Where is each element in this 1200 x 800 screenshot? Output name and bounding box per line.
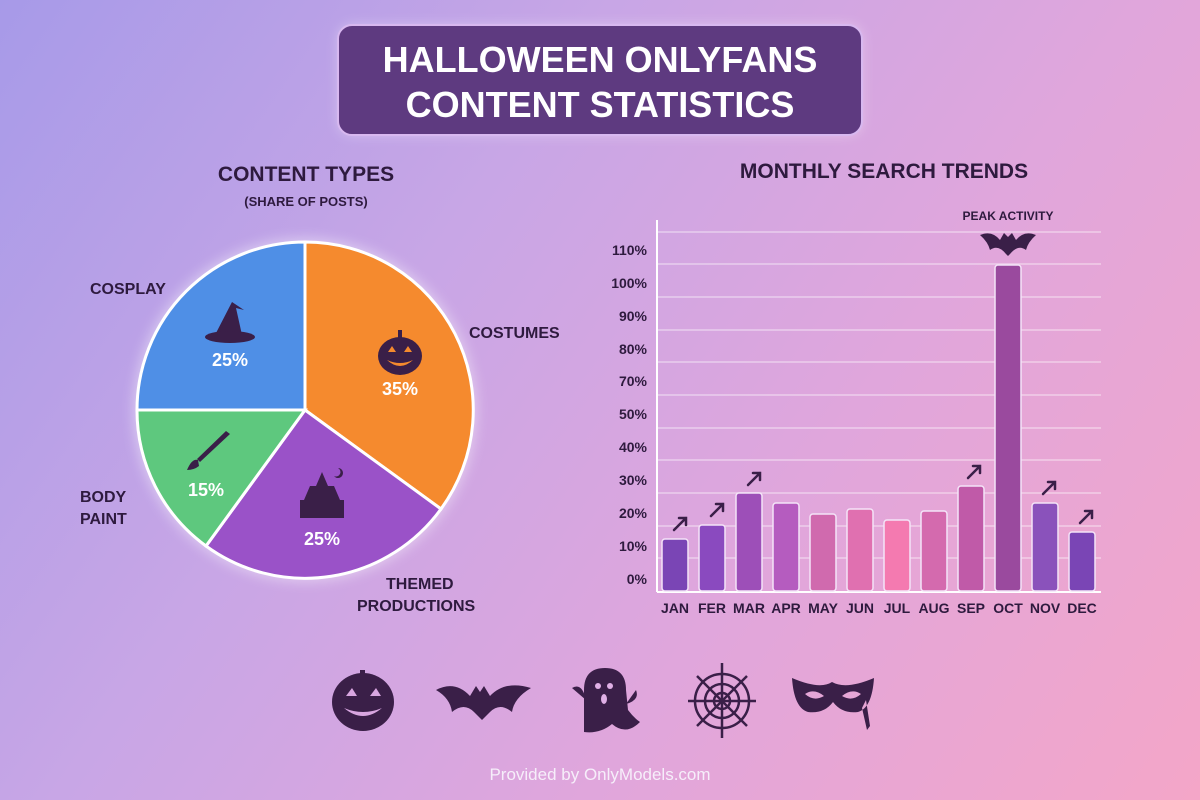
bar chart: FER	[698, 600, 726, 616]
bar chart: 100%	[611, 275, 648, 291]
heading: monthly search trends: MONTHLY SEARCH TRENDS	[740, 160, 1028, 183]
label: themed productions: PRODUCTIONS	[357, 598, 476, 615]
bar chart: 0%	[627, 571, 648, 587]
icon: bat peak	[980, 233, 1036, 256]
label: costumes: COSTUMES	[469, 325, 560, 342]
label: body paint: BODY	[80, 489, 127, 506]
title	[338, 25, 862, 135]
pie chart: 25%	[304, 529, 340, 549]
pie chart: 35%	[382, 379, 418, 399]
bar chart: MAR	[733, 600, 765, 616]
bar chart: 30%	[619, 472, 648, 488]
icon: ghost	[572, 668, 640, 732]
bar chart: 10%	[619, 538, 648, 554]
bar chart: APR	[771, 600, 801, 616]
label: cosplay: COSPLAY	[90, 281, 166, 298]
icon: spider web	[688, 663, 756, 738]
title: HALLOWEEN ONLYFANS	[383, 39, 817, 80]
icon: pumpkin	[378, 330, 422, 375]
heading: content types: CONTENT TYPES	[218, 163, 394, 186]
bar chart: MAY	[808, 600, 839, 616]
title: CONTENT STATISTICS	[406, 84, 794, 125]
icon: bat	[436, 685, 531, 720]
bar chart: SEP	[957, 600, 985, 616]
icon: witch hat	[205, 302, 255, 343]
pie chart: 25%	[212, 350, 248, 370]
bar chart	[611, 209, 1101, 616]
bar chart: NOV	[1030, 600, 1061, 616]
bar chart: 80%	[619, 341, 648, 357]
icon: haunted house	[300, 468, 344, 518]
bar chart: AUG	[918, 600, 950, 616]
bar chart: 20%	[619, 505, 648, 521]
bar chart: JUN	[846, 600, 874, 616]
bar chart: 50%	[619, 406, 648, 422]
heading: content types	[218, 163, 394, 209]
bar chart: 90%	[619, 308, 648, 324]
icons row	[332, 663, 874, 738]
bar chart: 70%	[619, 373, 648, 389]
peak label: PEAK ACTIVITY	[963, 209, 1053, 223]
pie chart: 15%	[188, 480, 224, 500]
bar chart: 40%	[619, 439, 648, 455]
pie chart	[133, 238, 477, 582]
bar chart: OCT	[993, 600, 1023, 616]
bar chart: JAN	[661, 600, 689, 616]
footer: Provided by OnlyModels.com	[489, 765, 711, 784]
bar chart: JUL	[884, 600, 911, 616]
bar chart: DEC	[1067, 600, 1097, 616]
trend arrows	[674, 466, 1092, 530]
heading: content types: (SHARE OF POSTS)	[244, 194, 368, 209]
icon: mask	[792, 678, 874, 730]
label: body paint: PAINT	[80, 511, 127, 528]
icon: pumpkin	[332, 670, 394, 731]
icon: paintbrush	[187, 431, 230, 470]
label: themed productions: THEMED	[386, 576, 454, 593]
bar chart: 110%	[612, 242, 648, 258]
